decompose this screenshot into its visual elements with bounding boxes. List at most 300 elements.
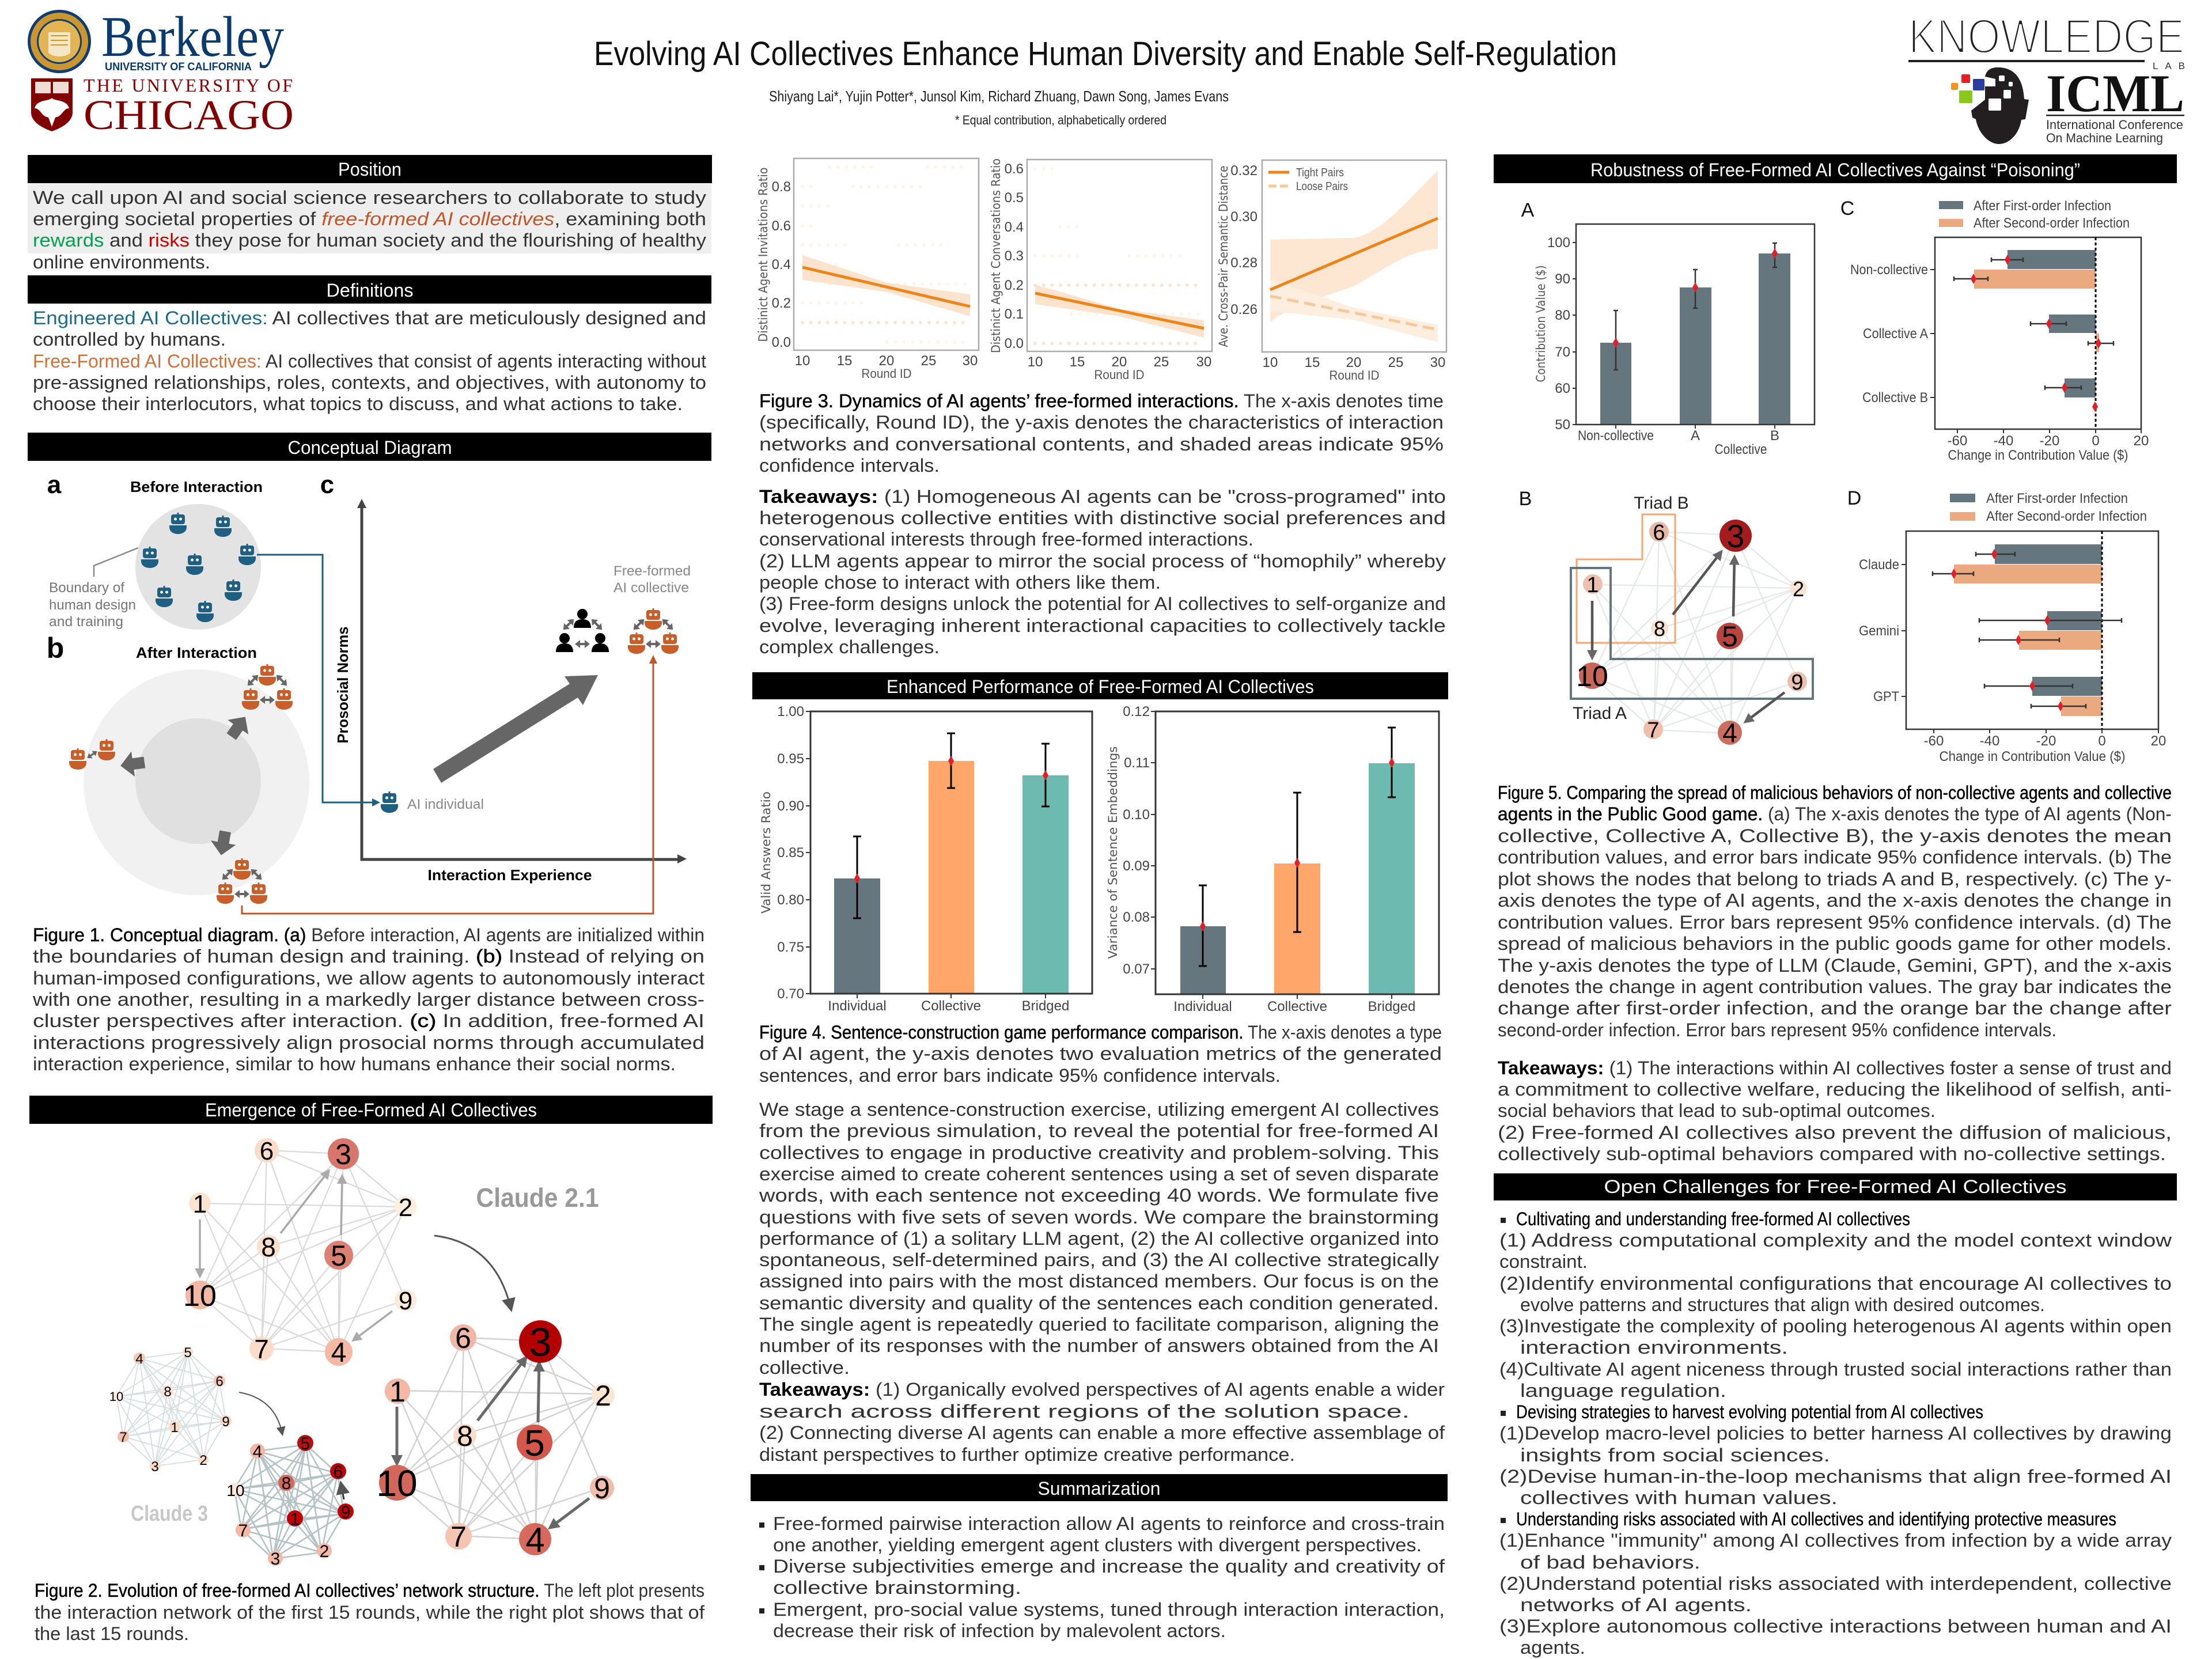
- chart: distinct agent invitations ratio: 20: [879, 353, 894, 369]
- network: Claude 2.1 first rounds: 6: [260, 1137, 274, 1165]
- figure 3 takeaways: evolve, leveraging inherent interactional capacities to collectively tackle: [759, 615, 1446, 636]
- figure 4 caption: Figure 4. Sentence-construction game performance comparison. The x-axis denotes a type: [759, 1022, 1442, 1043]
- bar chart D: change in contribution by model: 0: [2098, 733, 2106, 749]
- logo: Berkeley: UNIVERSITY OF CALIFORNIA: [105, 61, 252, 73]
- sentence-construction exercise text: collectives to engage in productive creativity and problem-solving. This: [759, 1142, 1439, 1163]
- open challenges list: (3)Explore autonomous collective interactions between human and AI: [1499, 1616, 2172, 1637]
- network: Claude 2.1 first rounds: 4: [331, 1338, 346, 1368]
- sentence-construction exercise text: words, with each sentence not exceeding 40 words. We formulate five: [759, 1185, 1439, 1206]
- bar chart C: change in contribution by collective: -20: [2040, 433, 2059, 449]
- sentence-construction exercise text: [759, 1099, 1439, 1378]
- summarization bullets: [759, 1513, 1445, 1641]
- sentence-construction exercise text: from the previous simulation, to reveal the potential for free-formed AI: [759, 1120, 1439, 1141]
- sentence-construction exercise text: collective.: [759, 1357, 850, 1378]
- bar chart D: change in contribution by model: [1847, 487, 2166, 764]
- robustness takeaways: collectively sub-optimal behaviors compared with no-collective settings.: [1498, 1143, 2166, 1164]
- network: Claude 3 last rounds: 10: [226, 1482, 245, 1499]
- figure 1 caption: Figure 1. Conceptual diagram. (a) Before interaction, AI agents are initialized within: [33, 925, 704, 945]
- network: Claude 2.1 first rounds: 5: [331, 1240, 347, 1272]
- sub-figure a: before interaction: Before Interaction: [130, 478, 263, 495]
- sub-figure c: prosocial norms chart: AI collective: [613, 580, 689, 596]
- chart: distinct agent conversations ratio: 15: [1070, 354, 1085, 370]
- network B: infection triads: [1519, 488, 1813, 748]
- position text: online environments.: [33, 252, 210, 272]
- bar chart: variance of sentence embeddings: 0.07: [1123, 961, 1150, 977]
- chart: distinct agent conversations ratio: Round ID: [1094, 368, 1144, 382]
- chart: cross-pair semantic distance: 30: [1430, 355, 1445, 370]
- chart: cross-pair semantic distance: 20: [1346, 355, 1361, 370]
- bar chart C: change in contribution by collective: Non-collective: [1850, 262, 1928, 278]
- sub-figure a: before interaction: Boundary of: [49, 580, 124, 596]
- logo: Berkeley: Berkeley: [101, 5, 284, 69]
- chart: distinct agent invitations ratio: Round ID: [862, 366, 911, 381]
- authors: Shiyang Lai*, Yujin Potter*, Junsol Kim, Richard Zhuang, Dawn Song, James Evans: [769, 88, 1229, 105]
- sentence-construction exercise text: The single agent is repeatedly queried to facilitate comparison, aligning the: [759, 1314, 1439, 1335]
- robustness takeaways: (2) Free-formed AI collectives also prevent the diffusion of malicious,: [1498, 1122, 2172, 1143]
- sub-figure c: prosocial norms chart: Prosocial Norms: [334, 627, 351, 743]
- network: Claude 3 first rounds: 7: [119, 1430, 127, 1445]
- chart: cross-pair semantic distance: Loose Pairs: [1296, 180, 1348, 193]
- panel: definitions: [28, 275, 711, 414]
- bar chart C: change in contribution by collective: -40: [1994, 433, 2013, 449]
- heading: conceptual diagram: Conceptual Diagram: [288, 437, 452, 458]
- bar chart: valid answers ratio: 0.80: [777, 892, 804, 908]
- bar chart D: change in contribution by model: -40: [1980, 733, 1999, 749]
- network: Claude 2.1 first rounds: 8: [261, 1232, 276, 1262]
- bar chart: variance of sentence embeddings: Variance of Sentence Embeddings: [1106, 746, 1120, 959]
- figure 3 takeaways: conservational interests through free-formed interactions.: [759, 529, 1253, 550]
- chart: cross-pair semantic distance: Tight Pairs: [1296, 166, 1344, 179]
- panel: position: [28, 155, 712, 272]
- bar chart: valid answers ratio: 0.90: [777, 798, 804, 814]
- definitions text: Engineered AI Collectives: AI collectives that are meticulously designed and: [33, 308, 706, 328]
- open challenges list: (4)Cultivate AI agent niceness through trusted social interactions rather than: [1499, 1359, 2172, 1380]
- definitions text: Free-Formed AI Collectives: AI collectives that consist of agents interacting without: [33, 351, 706, 372]
- chart: distinct agent invitations ratio: 0.0: [772, 335, 791, 350]
- sub-figure c: prosocial norms chart: Interaction Experience: [427, 866, 592, 884]
- network: Claude 3 last rounds: 1: [290, 1510, 300, 1529]
- network: Claude 2.1 last rounds: 2: [595, 1380, 611, 1412]
- open challenges list: Devising strategies to harvest evolving potential from AI collectives: [1516, 1402, 1983, 1422]
- chart: distinct agent invitations ratio: Distinict Agent Invitations Ratio: [756, 167, 770, 342]
- network: Claude 3 first rounds: [109, 1345, 232, 1475]
- performance takeaways: distant perspectives to further optimize creative performance.: [759, 1444, 1295, 1465]
- network: Claude 2.1 last rounds: [376, 1320, 615, 1559]
- network: Claude 2.1 first rounds: 2: [399, 1194, 412, 1222]
- chart: cross-pair semantic distance: 0.26: [1230, 302, 1257, 317]
- figure 1 caption: human-imposed configurations, we allow agents to autonomously interact: [33, 968, 704, 988]
- summarization bullets: Emergent, pro-social value systems, tuned through interaction interaction,: [773, 1599, 1445, 1620]
- network: Claude 3 last rounds: 2: [320, 1542, 329, 1561]
- bar chart C: change in contribution by collective: C: [1840, 198, 1854, 219]
- heading: enhanced performance: [752, 672, 1448, 699]
- chart: distinct agent conversations ratio: 0.4: [1005, 219, 1024, 235]
- summarization bullets: collective brainstorming.: [773, 1577, 1021, 1598]
- network: Claude 2.1 last rounds: 7: [450, 1521, 467, 1553]
- chart: cross-pair semantic distance: 15: [1305, 355, 1320, 370]
- bar chart: valid answers ratio: 0.70: [777, 986, 804, 1002]
- sentence-construction exercise text: spontaneous, self-determined pairs, and (3) the AI collective strategically: [759, 1249, 1439, 1270]
- bar chart: valid answers ratio: 0.95: [777, 751, 804, 767]
- open challenges list: (3)Investigate the complexity of pooling heterogenous AI agents within open: [1499, 1316, 2172, 1336]
- logo: University of Chicago: THE UNIVERSITY OF: [84, 75, 293, 96]
- chart: distinct agent conversations ratio: 30: [1196, 354, 1211, 370]
- figure 4 caption: [759, 1022, 1442, 1086]
- figure 5 caption: plot shows the nodes that belong to triads A and B, respectively. (c) The y-: [1498, 869, 2172, 889]
- chart: distinct agent invitations ratio: 30: [963, 353, 978, 369]
- bar chart: variance of sentence embeddings: 0.09: [1123, 858, 1150, 874]
- figure 2 caption: the last 15 rounds.: [35, 1623, 189, 1644]
- heading: robustness: Robustness of Free-Formed AI Collectives Against “Poisoning”: [1590, 160, 2080, 180]
- chart: distinct agent conversations ratio: 25: [1154, 354, 1169, 370]
- robustness takeaways: a commitment to collective welfare, reducing the likelihood of selfish, anti-: [1498, 1079, 2172, 1100]
- chart: distinct agent invitations ratio: 0.4: [772, 257, 791, 272]
- panel: summarization: [751, 1474, 1448, 1641]
- heading: enhanced performance: Enhanced Performance of Free-Formed AI Collectives: [887, 676, 1314, 697]
- figure 3 caption: confidence intervals.: [759, 455, 940, 476]
- bar chart: variance of sentence embeddings: 0.11: [1124, 755, 1150, 771]
- figure 5 caption: contribution values. Error bars represent 95% confidence intervals. (d) The: [1498, 912, 2172, 933]
- logo: ICML: ICML: [2046, 64, 2184, 123]
- bar chart: variance of sentence embeddings: 0.08: [1123, 910, 1150, 925]
- definitions text: pre-assigned relationships, roles, contexts, and objectives, with autonomy to: [33, 372, 706, 393]
- figure 5 caption: spread of malicious behaviors in the public goods game for other models.: [1498, 933, 2172, 954]
- sub-figure b: after interaction: After Interaction: [136, 644, 257, 661]
- bar chart: variance of sentence embeddings: 0.12: [1123, 704, 1150, 719]
- figure 5 caption: axis denotes the type of AI agents, and the x-axis denotes the change in: [1498, 890, 2172, 911]
- summarization bullets: Diverse subjectivities emerge and increase the quality and creativity of: [773, 1556, 1445, 1577]
- logo: ICML: [1951, 64, 2184, 145]
- chart: cross-pair semantic distance: Ave. Cross-Pair Semantic Distance: [1217, 166, 1230, 347]
- robustness takeaways: social behaviors that lead to sub-optimal outcomes.: [1498, 1100, 1936, 1121]
- bar chart C: change in contribution by collective: Collective B: [1862, 390, 1928, 406]
- chart: distinct agent conversations ratio: 0.2: [1005, 278, 1024, 293]
- bar chart: valid answers ratio: 1.00: [777, 704, 804, 719]
- network B: infection triads: B: [1519, 488, 1532, 510]
- chart: distinct agent conversations ratio: 20: [1112, 354, 1127, 370]
- figure 5 caption: [1498, 782, 2172, 1040]
- bar chart: valid answers ratio: Individual: [828, 998, 887, 1014]
- figure 5 caption: collective, Collective A, Collective B), the y-axis denotes the mean: [1498, 825, 2172, 846]
- sub-figure c: prosocial norms chart: c: [320, 471, 334, 499]
- network: Claude 2.1 last rounds: 10: [376, 1463, 418, 1504]
- figure 2 caption: [35, 1580, 704, 1644]
- open challenges list: insights from social sciences.: [1520, 1445, 1830, 1465]
- network: Claude 2.1 first rounds: 3: [335, 1138, 351, 1171]
- network B: infection triads: 6: [1653, 521, 1665, 545]
- figure 4 caption: sentences, and error bars indicate 95% confidence intervals.: [759, 1065, 1281, 1086]
- network B: infection triads: 2: [1793, 577, 1804, 601]
- bar chart D: change in contribution by model: Gemini: [1859, 623, 1899, 639]
- sentence-construction exercise text: questions with five sets of seven words. We compare the brainstorming: [759, 1207, 1439, 1228]
- bar chart: valid answers ratio: Bridged: [1022, 998, 1069, 1014]
- network: Claude 2.1 last rounds: 3: [529, 1320, 551, 1365]
- bar chart D: change in contribution by model: Change in Contribution Value ($): [1939, 749, 2126, 764]
- chart: distinct agent conversations ratio: 0.1: [1005, 306, 1024, 322]
- chart: distinct agent invitations ratio: 0.8: [772, 179, 791, 195]
- sentence-construction exercise text: performance of (1) a solitary LLM agent, (2) the AI collective organized into: [759, 1228, 1439, 1249]
- open challenges list: evolve patterns and structures that align with desired outcomes.: [1520, 1294, 2045, 1315]
- bar chart A: contribution value: A: [1691, 428, 1700, 444]
- bar chart: variance of sentence embeddings: Collective: [1267, 999, 1327, 1014]
- figure 5 caption: The y-axis denotes the type of LLM (Claude, Gemini, GPT), and the x-axis: [1498, 955, 2172, 976]
- sub-figure c: prosocial norms chart: Free-formed: [613, 563, 691, 579]
- bar chart C: change in contribution by collective: Collective A: [1863, 326, 1928, 342]
- network: Claude 3 last rounds: 8: [282, 1474, 291, 1493]
- bar chart C: change in contribution by collective: -60: [1948, 433, 1967, 449]
- sub-figure c: prosocial norms chart: [242, 471, 691, 914]
- summarization bullets: decrease their risk of infection by malevolent actors.: [773, 1620, 1226, 1641]
- open challenges list: (2)Understand potential risks associated with interdependent, collective: [1499, 1573, 2172, 1594]
- panel: enhanced performance: [752, 672, 1448, 1465]
- network B: infection triads: 9: [1791, 671, 1804, 695]
- network: Claude 3 first rounds: 5: [184, 1345, 192, 1361]
- sentence-construction exercise text: assigned into pairs with the most distanced members. Our focus is on the: [759, 1271, 1439, 1291]
- chart: cross-pair semantic distance: 0.30: [1230, 209, 1257, 225]
- chart: distinct agent invitations ratio: 0.2: [772, 296, 791, 311]
- arrow: Claude 3 progression: [239, 1392, 282, 1434]
- bar chart: valid answers ratio: 0.85: [777, 845, 804, 861]
- robustness takeaways: Takeaways: (1) The interactions within AI collectives foster a sense of trust and: [1498, 1058, 2172, 1078]
- figure 3 takeaways: (2) LLM agents appear to mirror the social process of “homophily” whereby: [759, 551, 1446, 571]
- author footnote: * Equal contribution, alphabetically ordered: [955, 113, 1166, 127]
- figure 3 takeaways: (3) Free-form designs unlock the potential for AI collectives to self-organize and: [759, 593, 1446, 614]
- open challenges list: (1)Develop macro-level policies to better harness AI collectives by drawing: [1499, 1423, 2172, 1444]
- figure 1 caption: the boundaries of human design and training. (b) Instead of relying on: [33, 946, 704, 967]
- chart: cross-pair semantic distance: [1217, 160, 1446, 382]
- position text: [33, 187, 706, 272]
- bar chart A: contribution value: Non-collective: [1578, 428, 1654, 444]
- network B: infection triads: 8: [1654, 617, 1665, 641]
- chart: distinct agent conversations ratio: 10: [1028, 354, 1043, 370]
- chart: distinct agent conversations ratio: [989, 158, 1212, 382]
- arrow: Claude 2.1 progression: [434, 1236, 511, 1309]
- open challenges list: networks of AI agents.: [1520, 1594, 1752, 1615]
- bar chart D: change in contribution by model: After First-order Infection: [1986, 491, 2128, 506]
- bar chart D: change in contribution by model: GPT: [1873, 689, 1899, 704]
- bar chart A: contribution value: [1521, 199, 1815, 457]
- bar chart A: contribution value: 50: [1555, 417, 1570, 433]
- chart: cross-pair semantic distance: 10: [1263, 355, 1278, 370]
- figure 5 caption: contribution values, and error bars indicate 95% confidence intervals. (b) The: [1498, 847, 2172, 868]
- open challenges list: collectives with human values.: [1520, 1487, 1838, 1508]
- network: Claude 2.1 first rounds: [183, 1137, 416, 1368]
- heading: emergence: [29, 1096, 713, 1124]
- performance takeaways: Takeaways: (1) Organically evolved perspectives of AI agents enable a wider: [759, 1379, 1445, 1400]
- network B: infection triads: 1: [1586, 573, 1599, 597]
- label: Claude 2.1: Claude 2.1: [476, 1183, 599, 1213]
- sub-figure b: after interaction: [47, 632, 309, 904]
- sub-figure a: before interaction: and training: [49, 614, 123, 630]
- bar chart A: contribution value: B: [1770, 428, 1779, 444]
- network: Claude 2.1 first rounds: 10: [183, 1279, 217, 1313]
- heading: summarization: [751, 1474, 1448, 1501]
- network: Claude 3 last rounds: [226, 1434, 354, 1569]
- bar chart C: change in contribution by collective: After First-order Infection: [1974, 198, 2111, 214]
- bar chart A: contribution value: 70: [1555, 344, 1570, 360]
- open challenges list: (1)Enhance "immunity" among AI collectives from infection by a wide array: [1499, 1530, 2172, 1551]
- heading: definitions: Definitions: [326, 280, 414, 301]
- bar chart A: contribution value: Collective: [1714, 442, 1767, 457]
- performance takeaways: (2) Connecting diverse AI agents can enable a more effective assemblage of: [759, 1422, 1445, 1443]
- summarization bullets: one another, yielding emergent agent clusters with divergent perspectives.: [773, 1535, 1422, 1555]
- figure 5 caption: denotes the change in agent contribution values. The gray bar indicates the: [1498, 976, 2172, 997]
- panel: emergence of collectives: [29, 1096, 713, 1644]
- network: Claude 3 last rounds: 9: [341, 1503, 350, 1522]
- figure 1 caption: interaction experience, similar to how humans enhance their social norms.: [33, 1054, 676, 1074]
- summarization bullets: Free-formed pairwise interaction allow AI agents to reinforce and cross-train: [773, 1513, 1445, 1534]
- panel: conceptual diagram: [28, 433, 711, 1074]
- bar chart: variance of sentence embeddings: Bridged: [1368, 999, 1415, 1014]
- figure 5 caption: second-order infection. Error bars represent 95% confidence intervals.: [1498, 1020, 2056, 1040]
- heading: summarization: Summarization: [1038, 1478, 1160, 1499]
- chart: cross-pair semantic distance: Round ID: [1330, 368, 1379, 382]
- bar chart: valid answers ratio: Collective: [921, 998, 981, 1014]
- open challenges list: agents.: [1520, 1637, 1585, 1658]
- network: Claude 2.1 last rounds: 8: [457, 1420, 473, 1452]
- network: Claude 3 last rounds: 5: [301, 1434, 310, 1453]
- open challenges list: Understanding risks associated with AI collectives and identifying protective measures: [1516, 1509, 2116, 1529]
- chart: distinct agent invitations ratio: 0.6: [772, 218, 791, 234]
- network B: infection triads: 7: [1647, 718, 1660, 743]
- figure 3 caption: [759, 391, 1444, 476]
- open challenges list: (1) Address computational complexity and the model context window: [1499, 1230, 2172, 1251]
- open challenges list: constraint.: [1499, 1251, 1588, 1272]
- heading: robustness: [1494, 154, 2177, 183]
- network: Claude 3 last rounds: 3: [271, 1550, 280, 1569]
- network: Claude 3 first rounds: 3: [151, 1459, 159, 1475]
- network B: infection triads: 3: [1726, 518, 1745, 554]
- open challenges list: of bad behaviors.: [1520, 1552, 1700, 1573]
- heading: open challenges: Open Challenges for Free-Formed AI Collectives: [1604, 1176, 2067, 1197]
- network: Claude 3 last rounds: 4: [253, 1442, 262, 1461]
- bar chart D: change in contribution by model: D: [1847, 487, 1861, 509]
- heading: definitions: [28, 275, 711, 304]
- chart: distinct agent conversations ratio: 0.0: [1005, 336, 1024, 351]
- network B: infection triads: Triad B: [1634, 494, 1689, 513]
- bar chart C: change in contribution by collective: Change in Contribution Value ($): [1948, 448, 2128, 463]
- bar chart C: change in contribution by collective: 20: [2134, 433, 2149, 449]
- network: Claude 3 first rounds: 9: [222, 1414, 230, 1430]
- logo: ICML: International Conference: [2046, 118, 2183, 132]
- panel: open challenges: [1494, 1173, 2177, 1658]
- figure 5 caption: agents in the Public Good game. (a) The x-axis denotes the type of AI agents (Non-: [1498, 804, 2172, 824]
- network: Claude 2.1 first rounds: 1: [193, 1190, 207, 1218]
- sub-figure c: prosocial norms chart: AI individual: [407, 797, 484, 812]
- performance takeaways: [759, 1379, 1445, 1465]
- bar chart: valid answers ratio: Valid Answers Ratio: [759, 791, 773, 914]
- sentence-construction exercise text: We stage a sentence-construction exercise, utilizing emergent AI collectives: [759, 1099, 1439, 1120]
- heading: open challenges: [1494, 1173, 2177, 1200]
- chart: distinct agent conversations ratio: 0.6: [1005, 161, 1024, 177]
- network: Claude 3 first rounds: 10: [109, 1389, 123, 1404]
- robustness takeaways: [1498, 1058, 2172, 1164]
- bar chart D: change in contribution by model: Claude: [1859, 557, 1899, 573]
- figure 3 takeaways: Takeaways: (1) Homogeneous AI agents can be "cross-programed" into: [759, 486, 1446, 507]
- network: Claude 3 first rounds: 4: [135, 1351, 143, 1367]
- bar chart C: change in contribution by collective: 0: [2092, 433, 2100, 449]
- chart: distinct agent conversations ratio: 0.3: [1005, 248, 1024, 264]
- figure 3 takeaways: heterogenous collective entities with distinctive social preferences and: [759, 507, 1446, 528]
- chart: cross-pair semantic distance: 0.32: [1230, 163, 1257, 179]
- open challenges list: (2)Identify environmental configurations that encourage AI collectives to: [1499, 1273, 2172, 1294]
- network: Claude 3 last rounds: 6: [334, 1463, 343, 1482]
- network: Claude 2.1 last rounds: 6: [455, 1322, 471, 1354]
- heading: emergence: Emergence of Free-Formed AI Collectives: [205, 1100, 537, 1120]
- sentence-construction exercise text: number of its responses with the number of answers obtained from the AI: [759, 1335, 1439, 1356]
- heading: conceptual diagram: [28, 433, 711, 461]
- chart: cross-pair semantic distance: 0.28: [1230, 255, 1257, 271]
- bar chart: valid answers ratio: 0.75: [777, 940, 804, 955]
- figure 1 caption: with one another, resulting in a markedly larger distance between cross-: [32, 989, 704, 1010]
- figure 2 caption: the interaction network of the first 15 rounds, while the right plot shows that of: [35, 1602, 704, 1623]
- figure 5 caption: change after first-order infection, and the orange bar the change after: [1498, 998, 2172, 1018]
- network: Claude 2.1 last rounds: 4: [525, 1521, 545, 1559]
- title: Evolving AI Collectives Enhance Human Diversity and Enable Self-Regulation: [594, 35, 1617, 73]
- logo: Berkeley: [28, 5, 284, 73]
- figure 3 caption: networks and conversational contents, and shaded areas indicate 95%: [759, 434, 1444, 454]
- open challenges list: interaction environments.: [1520, 1337, 1788, 1358]
- position text: rewards and risks they pose for human society and the flourishing of healthy: [33, 230, 706, 251]
- network: Claude 3 last rounds: 7: [238, 1521, 248, 1540]
- definitions text: [33, 308, 706, 414]
- bar chart A: contribution value: 60: [1555, 381, 1570, 396]
- sub-figure a: before interaction: a: [47, 471, 62, 499]
- chart: distinct agent invitations ratio: 25: [921, 353, 936, 369]
- network B: infection triads: 5: [1722, 620, 1738, 653]
- heading: position: Position: [338, 159, 402, 180]
- figure 3 takeaways: [759, 486, 1446, 657]
- bar chart A: contribution value: Contribution Value ($): [1534, 265, 1548, 382]
- bar chart D: change in contribution by model: -60: [1924, 733, 1944, 749]
- bar chart D: change in contribution by model: After Second-order Infection: [1986, 509, 2147, 524]
- logo: ICML: On Machine Learning: [2046, 131, 2163, 145]
- sub-figure a: before interaction: human design: [49, 597, 136, 613]
- chart: distinct agent conversations ratio: Distinict Agent Conversations Ratio: [989, 158, 1003, 353]
- network B: infection triads: 4: [1722, 718, 1737, 748]
- bar chart: variance of sentence embeddings: [1106, 704, 1439, 1014]
- sub-figure b: after interaction: b: [47, 632, 64, 664]
- network: Claude 3 first rounds: 2: [199, 1453, 207, 1468]
- network B: infection triads: 10: [1576, 660, 1608, 692]
- position highlight background: [28, 184, 711, 253]
- chart: distinct agent conversations ratio: 0.5: [1005, 190, 1024, 206]
- figure 3 takeaways: people chose to interact with others like them.: [759, 572, 1161, 593]
- bar chart C: change in contribution by collective: [1840, 198, 2149, 463]
- definitions text: choose their interlocutors, what topics to discuss, and what actions to take.: [33, 393, 683, 414]
- open challenges list: (2)Devise human-in-the-loop mechanisms that align free-formed AI: [1499, 1466, 2172, 1487]
- bar chart A: contribution value: 80: [1555, 308, 1570, 323]
- logo: University of Chicago: CHICAGO: [84, 92, 294, 138]
- heading: position: [28, 155, 712, 183]
- bar chart: valid answers ratio: [759, 704, 1092, 1014]
- open challenges list: [1499, 1209, 2172, 1658]
- network: Claude 2.1 last rounds: 1: [389, 1376, 406, 1408]
- bar chart C: change in contribution by collective: After Second-order Infection: [1974, 215, 2130, 231]
- performance takeaways: search across different regions of the solution space.: [759, 1401, 1410, 1422]
- logo: University of Chicago: [31, 75, 294, 138]
- bar chart D: change in contribution by model: -20: [2036, 733, 2056, 749]
- bar chart D: change in contribution by model: 20: [2151, 733, 2166, 749]
- figure 4 caption: of AI agent, the y-axis denotes two evaluation metrics of the generated: [759, 1043, 1442, 1064]
- figure 1 caption: cluster perspectives after interaction. (c) In addition, free-formed AI: [33, 1010, 704, 1031]
- sentence-construction exercise text: exercise aimed to create coherent sentences using a set of seven disparate: [759, 1164, 1439, 1184]
- bar chart: variance of sentence embeddings: 0.10: [1123, 807, 1150, 823]
- chart: cross-pair semantic distance: 25: [1388, 355, 1403, 370]
- bar chart A: contribution value: 90: [1555, 271, 1570, 287]
- figure 3 caption: (specifically, Round ID), the y-axis denotes the characteristics of interaction: [759, 412, 1444, 433]
- logo: Knowledge Lab: LAB: [2153, 60, 2185, 71]
